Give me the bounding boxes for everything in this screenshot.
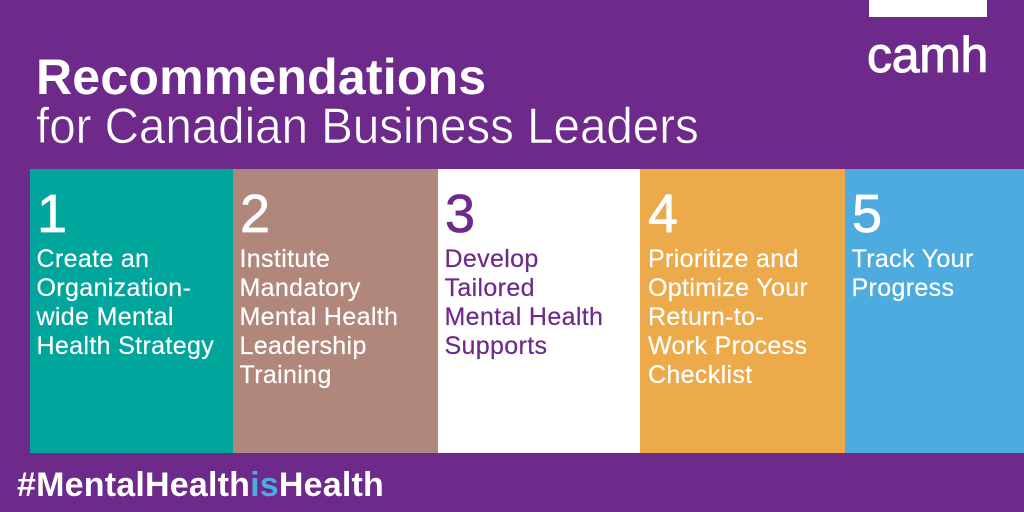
text 3: Supports (444, 332, 547, 360)
panel 3: supports (438, 169, 640, 453)
text 2: Mental Health (240, 303, 398, 331)
panel 1: strategy (30, 169, 233, 453)
text 1: Organization- (36, 274, 191, 302)
text 3: Develop (444, 245, 539, 273)
text 4: Return-to- (648, 303, 764, 331)
number 1: 1 (37, 184, 67, 244)
title line 2: for Canadian Business Leaders (36, 98, 699, 154)
text 4: Optimize Your (648, 274, 808, 302)
text 5: Progress (852, 274, 954, 302)
number 5: 5 (852, 184, 882, 244)
text 3: Mental Health (444, 303, 603, 331)
text 3 (444, 245, 603, 360)
text 2: Institute (240, 245, 330, 273)
title (36, 49, 699, 154)
hashtag: #MentalHealthisHealth (17, 466, 384, 504)
text 2: Mandatory (240, 274, 361, 302)
text 2: Training (240, 361, 332, 389)
number 2: 2 (240, 184, 270, 244)
text 3: Tailored (444, 274, 535, 302)
text 2 (240, 245, 398, 389)
text 4 (648, 245, 808, 389)
text 5 (852, 245, 974, 302)
number 4: 4 (648, 184, 678, 244)
text 1: wide Mental (36, 303, 174, 331)
logo: camh: camh (867, 27, 988, 83)
text 1 (36, 245, 214, 360)
text 2: Leadership (240, 332, 367, 360)
title line 1: Recommendations (36, 49, 486, 105)
text 4: Work Process (648, 332, 807, 360)
text 4: Checklist (648, 361, 753, 389)
text 1: Create an (36, 245, 149, 273)
panel 5: track (845, 169, 1024, 453)
text 4: Prioritize and (648, 245, 799, 273)
text 5: Track Your (852, 245, 974, 273)
panel 2: training (233, 169, 438, 453)
logo bar (869, 0, 987, 17)
panel 4: return to work (640, 169, 845, 453)
number 3: 3 (445, 184, 475, 244)
text 1: Health Strategy (36, 332, 214, 360)
